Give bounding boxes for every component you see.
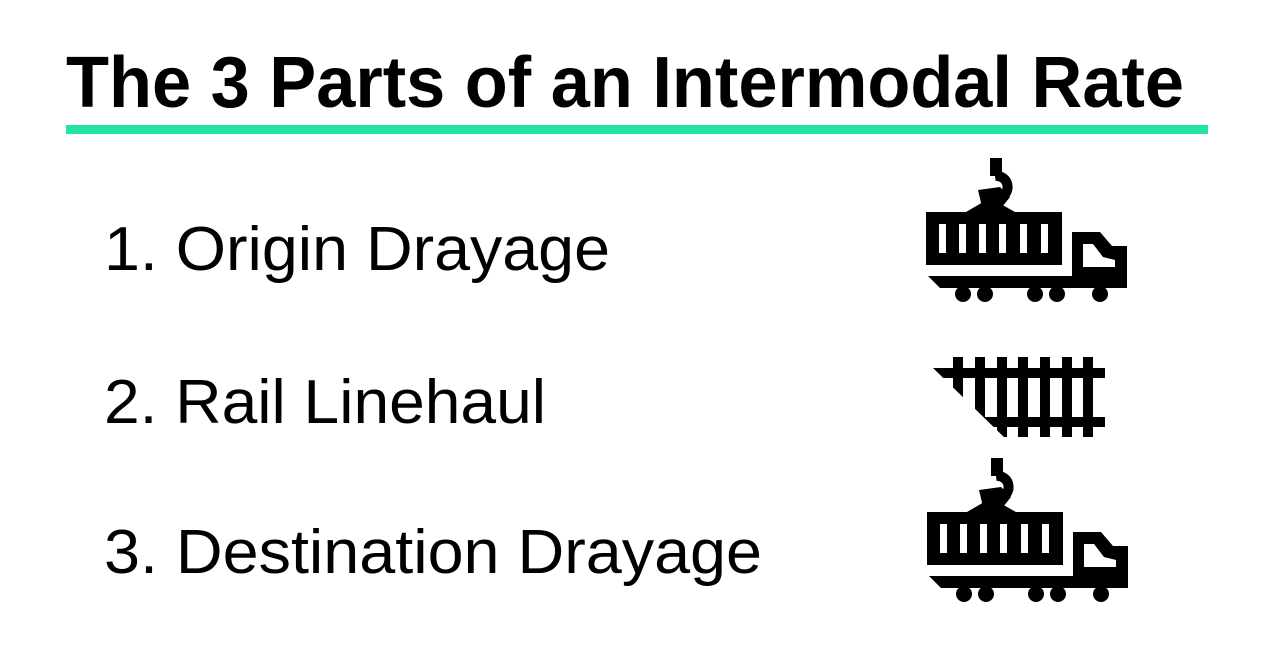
item 1 text: 1. Origin Drayage: [104, 215, 610, 284]
icon: train with container crane (origin): [926, 158, 1127, 302]
icon: train with container crane (destination): [927, 458, 1128, 602]
title: The 3 Parts of an Intermodal Rate: [66, 43, 1184, 123]
item 2 text: 2. Rail Linehaul: [104, 368, 546, 437]
item 3 text: 3. Destination Drayage: [104, 518, 762, 587]
icon: rail track: [920, 357, 1105, 437]
